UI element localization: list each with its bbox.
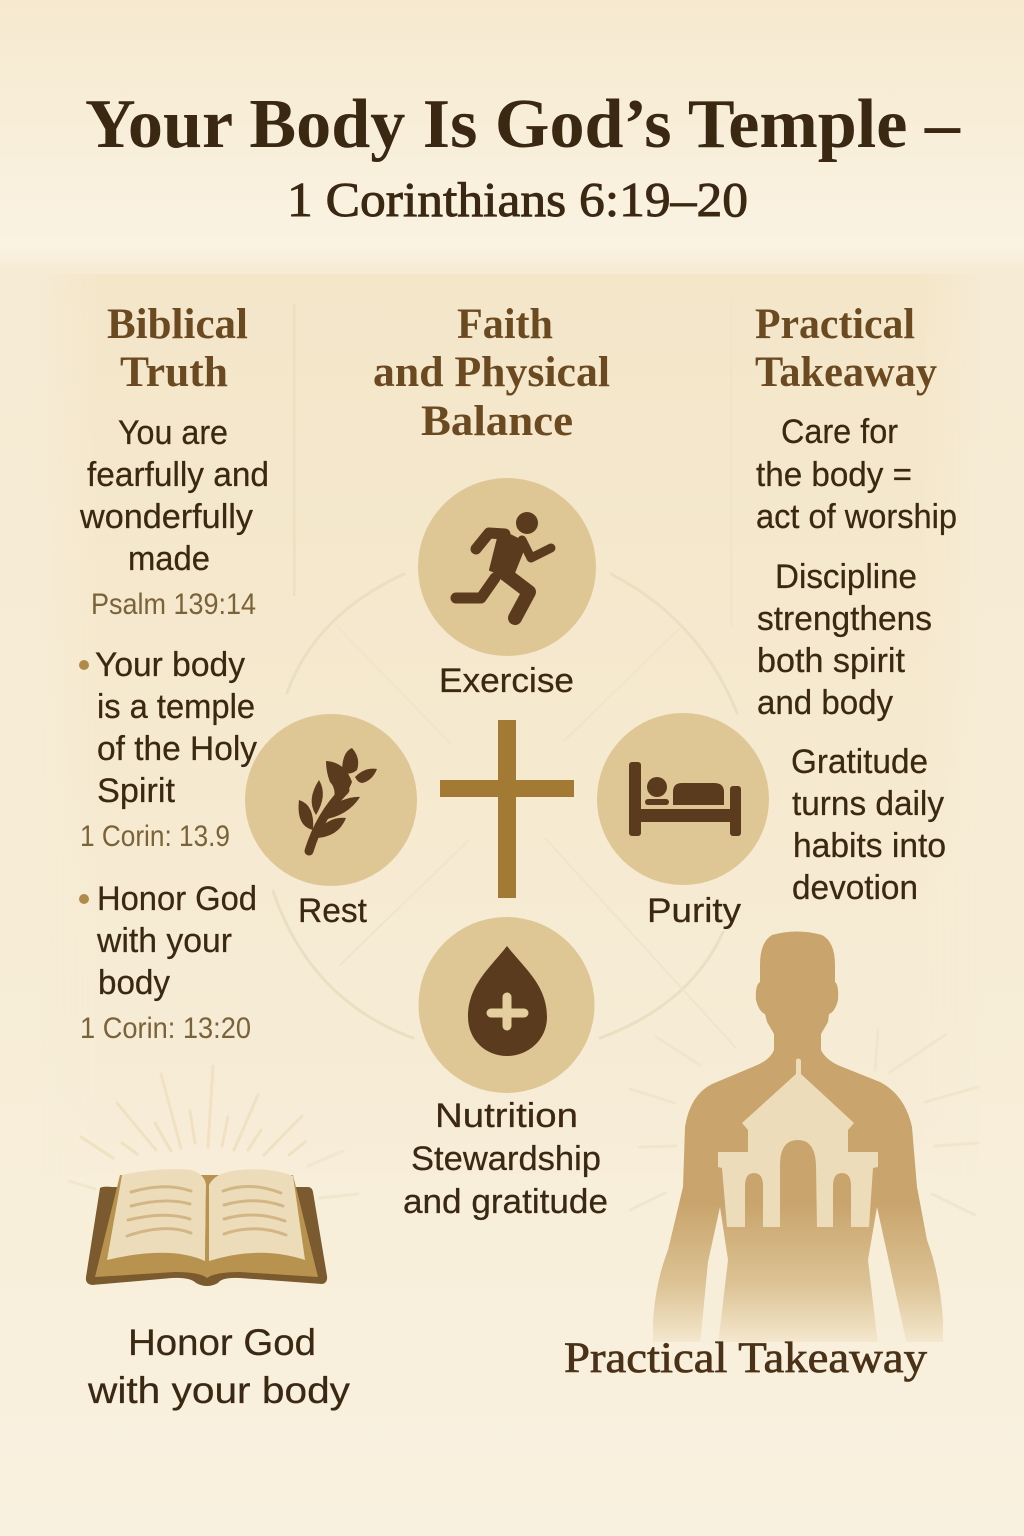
heading: faith and physical balance: and Physical xyxy=(373,349,610,396)
bullet: temple of the Holy Spirit: Spirit xyxy=(97,772,176,810)
label: nutrition: Stewardship xyxy=(411,1140,601,1178)
bullet: temple of the Holy Spirit: 1 Corin: 13.9 xyxy=(80,820,230,853)
text: gratitude: habits into xyxy=(793,827,946,865)
caption: honor God: Honor God xyxy=(128,1322,316,1363)
text: care for the body: Care for xyxy=(781,413,898,451)
text: fearfully and wonderfully made: made xyxy=(128,540,210,578)
page lines xyxy=(127,1186,286,1236)
illustration: open book xyxy=(69,1066,358,1286)
heading: practical takeaway xyxy=(755,301,937,396)
heading: faith and physical balance: Faith xyxy=(457,301,553,348)
title xyxy=(85,86,961,227)
node: purity: Purity xyxy=(647,892,741,930)
node: rest: Rest xyxy=(298,892,368,930)
bullet: temple of the Holy Spirit xyxy=(79,646,257,853)
heading: faith and physical balance xyxy=(373,301,610,445)
text: fearfully and wonderfully made: fearfully and xyxy=(87,456,269,494)
caption: honor God: with your body xyxy=(87,1370,351,1411)
connecting arcs and lines xyxy=(273,574,737,1048)
rays xyxy=(630,1030,978,1215)
text: fearfully and wonderfully made: Psalm 139:14 xyxy=(91,588,256,621)
node: exercise: Exercise xyxy=(439,662,574,700)
node: purity xyxy=(597,713,769,930)
text: fearfully and wonderfully made xyxy=(79,414,269,621)
text: care for the body xyxy=(756,413,957,536)
text: gratitude: turns daily xyxy=(792,785,944,823)
bullet: temple of the Holy Spirit: Your body xyxy=(95,646,245,684)
cross xyxy=(440,720,574,898)
label: nutrition: and gratitude xyxy=(403,1183,608,1221)
heading: faith and physical balance: Balance xyxy=(421,398,573,445)
text: discipline: both spirit xyxy=(757,642,906,680)
text: discipline: strengthens xyxy=(757,600,932,638)
bullet: honor God with your body: with your xyxy=(96,922,232,960)
icon: drop with plus xyxy=(468,946,547,1056)
caption: honor God xyxy=(87,1322,351,1411)
node: rest xyxy=(245,714,417,930)
title: Your Body Is God’s Temple – xyxy=(85,86,961,163)
bullet: honor God with your body: Honor God xyxy=(97,880,257,918)
text: care for the body: the body = xyxy=(756,456,912,494)
bullet: honor God with your body: body xyxy=(98,964,170,1002)
heading: practical takeaway: Takeaway xyxy=(755,349,937,396)
text: care for the body: act of worship xyxy=(756,498,957,536)
heading: practical takeaway: Practical xyxy=(755,301,915,348)
text: fearfully and wonderfully made: You are xyxy=(118,414,228,452)
title: 1 Corinthians 6:19–20 xyxy=(287,172,748,227)
silhouette xyxy=(653,932,943,1342)
text: discipline xyxy=(757,558,932,722)
label: nutrition: Nutrition xyxy=(435,1097,578,1135)
heading: biblical truth xyxy=(107,301,248,396)
node: exercise xyxy=(418,478,596,700)
text: fearfully and wonderfully made: wonderfully xyxy=(79,498,253,536)
text: discipline: and body xyxy=(757,684,893,722)
icon: leafy branch xyxy=(299,748,377,851)
bullet: honor God with your body: 1 Corin: 13:20 xyxy=(80,1012,251,1045)
temple xyxy=(718,1058,878,1227)
text: gratitude: devotion xyxy=(792,869,918,907)
illustration: body as temple xyxy=(630,932,978,1345)
icon: bed xyxy=(629,762,741,836)
arm gaps xyxy=(700,1207,728,1345)
icon: runner xyxy=(456,512,551,618)
bullet: honor God with your body xyxy=(79,880,257,1045)
text: discipline: Discipline xyxy=(775,558,917,596)
panel: practical takeaway xyxy=(755,301,957,907)
bullet: temple of the Holy Spirit: of the Holy xyxy=(97,730,257,768)
heading: biblical truth: Truth xyxy=(120,349,228,396)
panel: biblical truth xyxy=(79,301,269,1045)
text: gratitude xyxy=(791,743,946,907)
label: nutrition xyxy=(403,1097,608,1221)
heading: biblical truth: Biblical xyxy=(107,301,248,348)
node: nutrition xyxy=(403,917,608,1221)
bullet: temple of the Holy Spirit: is a temple xyxy=(97,688,255,726)
text: gratitude: Gratitude xyxy=(791,743,928,781)
caption: practical takeaway: Practical Takeaway xyxy=(564,1335,928,1382)
rays xyxy=(81,1066,305,1158)
